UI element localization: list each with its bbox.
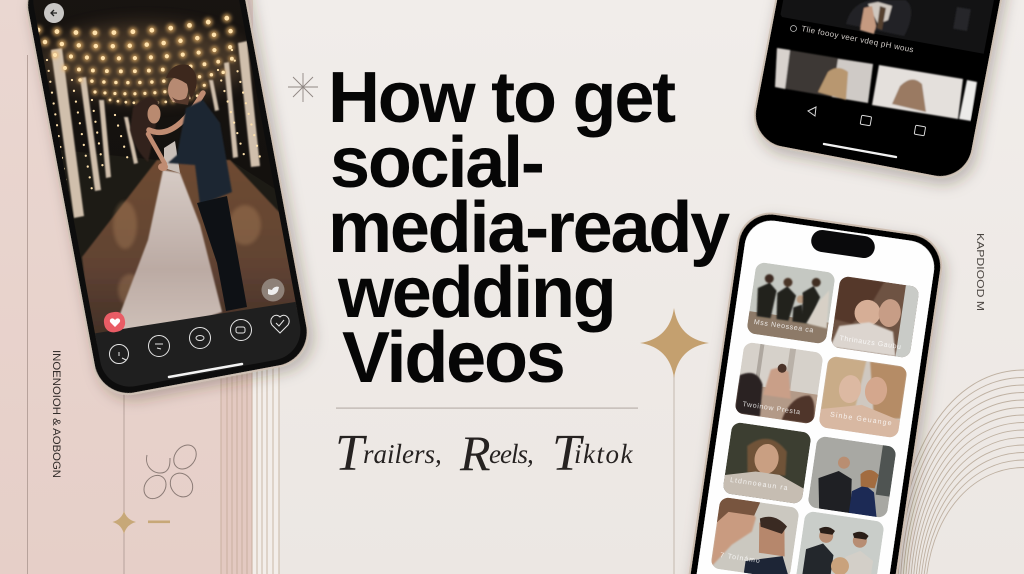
video preview — [780, 0, 994, 54]
tile: two men with bouquet — [795, 511, 885, 574]
subtitle: iktok — [574, 439, 634, 469]
hands — [158, 163, 168, 171]
tile: portrait on greenery: Ltdnnoeaun ra — [730, 477, 788, 492]
icon: heart badge — [104, 312, 126, 332]
icon: small gold star — [112, 511, 136, 534]
tile: bridal room: Twoinow Presta — [742, 401, 801, 416]
camera pill — [810, 228, 876, 260]
vertical guide line with small star — [123, 390, 125, 574]
icon: four loop ornament — [139, 441, 201, 503]
home indicator — [169, 364, 242, 377]
title: How to get — [328, 58, 676, 138]
phone body top right — [748, 0, 1023, 184]
phone: wedding couple video — [24, 0, 321, 408]
title: wedding — [337, 253, 615, 333]
screen content — [770, 0, 1010, 157]
bride hair — [130, 97, 159, 162]
bride face and arms — [148, 93, 203, 164]
groom in preview — [846, 0, 971, 36]
phone body grid — [674, 208, 947, 574]
rotated side caption left: INOENOIOH & AOBOGN — [50, 350, 62, 478]
bride dress — [112, 170, 222, 335]
tile: group portrait: Mss Neossea ca — [753, 319, 814, 334]
preview caption: Tlie foooy veer vdeq pH wous — [801, 24, 914, 54]
rotated side caption right: KAPDIOOD M — [974, 233, 985, 311]
subtitle: R — [459, 425, 491, 481]
title: social- — [330, 123, 543, 203]
title — [328, 58, 730, 398]
groom suit — [168, 100, 232, 205]
tile: two brides: Sinbe Geuange — [830, 411, 892, 427]
tile: group portrait — [746, 262, 836, 344]
tile: couple with drinks — [807, 436, 897, 518]
tile: portrait on greenery — [722, 422, 812, 504]
bride bodice — [164, 141, 180, 173]
concentric arcs — [893, 370, 1024, 574]
title: media-ready — [328, 188, 730, 268]
thumbnail strip — [775, 48, 977, 121]
title: Videos — [342, 318, 564, 398]
toolbar icons — [110, 315, 289, 364]
nav icons — [808, 107, 926, 136]
groom head — [166, 65, 197, 105]
tile: bride closeup: Thrinauzs Gaubu — [839, 335, 901, 351]
phone: clip gallery top right — [748, 0, 1023, 184]
gold dash — [148, 520, 170, 523]
vertical stripes — [221, 360, 279, 574]
panel: blush side band — [0, 0, 253, 574]
home indicator — [824, 144, 896, 157]
subtitle: T — [335, 425, 367, 482]
icon: thin asterisk — [288, 73, 318, 102]
subtitle: T — [552, 425, 584, 482]
divider rule — [336, 408, 638, 409]
phone: photo grid — [674, 208, 947, 574]
phone body left — [20, 0, 315, 401]
ambient glow — [40, 24, 250, 100]
tile: groom and glasses: 7 Tolnámo — [720, 552, 760, 565]
app toolbar — [95, 302, 300, 386]
tile: two brides — [818, 356, 908, 438]
subtitle: eels, — [489, 439, 533, 469]
icon: large gold star with stem — [640, 308, 709, 574]
groom trousers — [197, 196, 247, 311]
tile: groom and glasses — [710, 497, 800, 574]
subtitle: railers, — [363, 439, 442, 469]
icon: bird bubble — [262, 278, 284, 302]
vertical guide line left — [26, 55, 28, 574]
photo: couple under string lights — [34, 0, 300, 386]
icon: back button — [44, 3, 64, 23]
tile: bridal room — [734, 342, 824, 424]
tile: bride closeup — [830, 276, 920, 358]
